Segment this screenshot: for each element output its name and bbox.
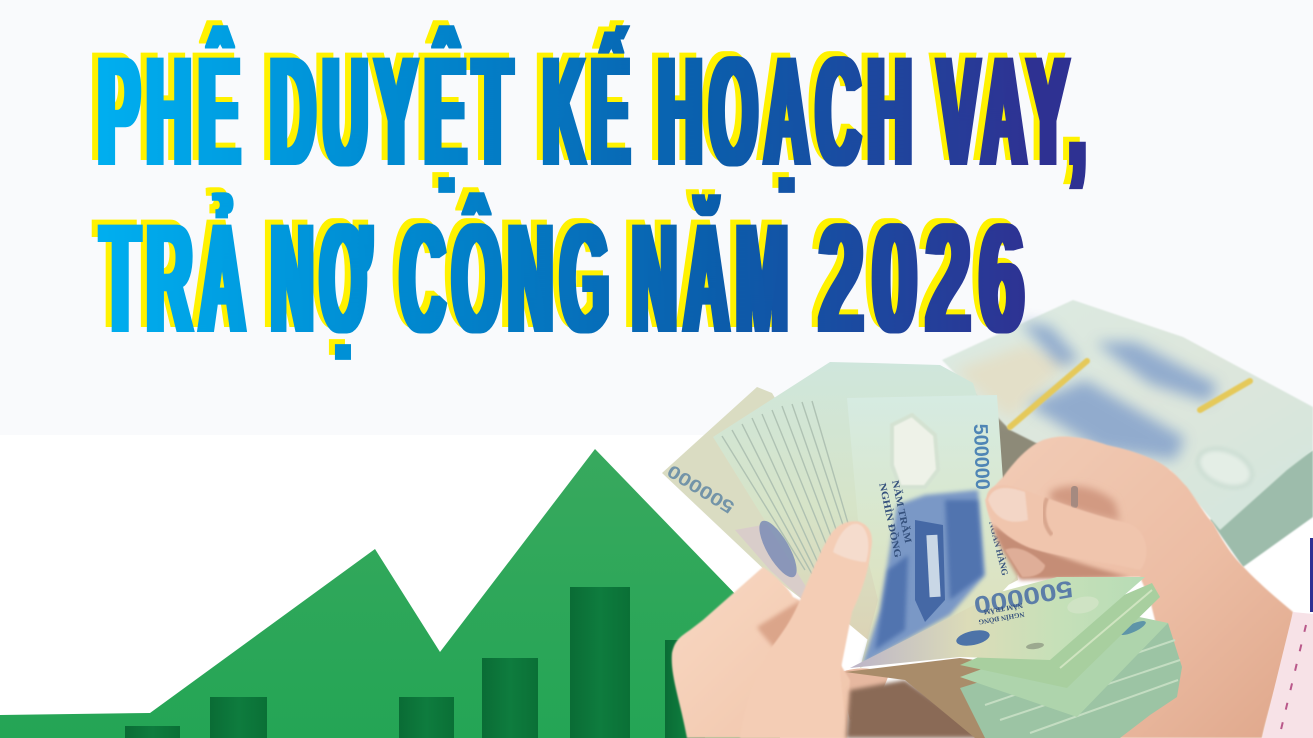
middle note	[960, 615, 1168, 717]
value in words on front note	[876, 479, 917, 559]
right hand	[985, 436, 1293, 738]
title line 1: KẾ	[543, 25, 636, 199]
shadow between knuckles	[1050, 486, 1120, 521]
knuckle crease	[1044, 498, 1052, 535]
title line 2: 2026	[819, 192, 1033, 366]
curled finger below	[1005, 548, 1045, 577]
cuff stitching	[1279, 625, 1306, 738]
value in words on top note	[976, 601, 1025, 626]
extra finger under thumb	[838, 668, 888, 720]
title line 1: PHÊ	[98, 25, 247, 199]
lower finger shadow	[993, 525, 1130, 580]
title line 2: TRẢ	[101, 192, 252, 366]
bar 3	[399, 697, 454, 738]
index finger	[987, 485, 1146, 570]
value in words on front note: NGHÌN ĐỒNG	[876, 482, 905, 559]
blue printing patches	[1020, 322, 1218, 460]
hand and wrist	[985, 436, 1293, 738]
fingernail	[988, 488, 1028, 522]
value in words on top note: NGHÌN ĐỒNG	[977, 610, 1025, 626]
grey oval mark	[1026, 642, 1044, 650]
title line 2	[101, 192, 1033, 366]
title line 1: HOẠCH	[658, 25, 919, 199]
shadow gap under stack	[973, 390, 1050, 500]
value in words on top note: NĂM TRĂM	[983, 601, 1023, 616]
shirt cuff	[1262, 612, 1313, 738]
top note face	[850, 577, 1145, 668]
title line 1	[98, 25, 1093, 199]
upper note edge line	[1060, 590, 1152, 668]
rear note pink lower edge	[735, 520, 825, 600]
outer green notes	[960, 623, 1182, 738]
bar 6	[665, 640, 705, 738]
denomination on rear note: 500000	[664, 461, 738, 517]
background: upper pale panel	[0, 0, 1313, 435]
fan of banknotes	[662, 362, 1018, 668]
bank name on front note: NGÂN HÀNG	[987, 520, 1010, 577]
title	[98, 25, 1093, 366]
chart silhouette	[0, 449, 780, 738]
left hand	[672, 521, 888, 738]
temple building	[915, 520, 945, 622]
palm	[672, 567, 850, 738]
denomination on front note: 500000	[969, 423, 993, 490]
bottom banknote stack	[845, 574, 1182, 738]
darker tree engraving	[875, 500, 983, 650]
blurred stack of banknotes	[942, 300, 1313, 567]
front note	[847, 395, 1018, 668]
dark shadow under notes	[846, 680, 990, 738]
rearmost note	[662, 387, 860, 600]
thumbnail	[833, 524, 868, 562]
pale building panel	[926, 535, 941, 597]
value in words on front note: NĂM TRĂM	[889, 479, 914, 545]
seal on top note	[955, 628, 991, 648]
title line 2: NỢ	[271, 192, 377, 366]
green mountain chart	[0, 449, 780, 738]
stack side	[1210, 450, 1313, 567]
bar 5	[570, 587, 630, 738]
green note edge lines	[985, 640, 1180, 733]
title line 2: CÔNG	[400, 192, 616, 366]
cuff fabric	[1262, 612, 1313, 738]
ring	[1071, 486, 1078, 508]
title line 2: NĂM	[632, 192, 795, 366]
fan note edges	[722, 401, 850, 576]
cropped navy sliver at right edge	[1310, 538, 1313, 612]
stack top face	[942, 300, 1313, 530]
page edges	[845, 658, 1090, 738]
finger shadow	[757, 600, 802, 652]
bar 1	[125, 726, 180, 738]
lotus watermark	[892, 415, 938, 487]
bar 4	[482, 658, 538, 738]
peach tint	[955, 345, 1070, 420]
fanned notes	[713, 362, 1018, 650]
blue engraving	[862, 490, 985, 665]
denomination on top note: 500000	[972, 574, 1075, 618]
upper note edge	[960, 583, 1160, 688]
blue patch on middle note	[1119, 618, 1147, 638]
thumb	[740, 521, 872, 738]
pale mark on top note	[1066, 594, 1100, 616]
background: white lower panel	[0, 435, 1313, 738]
title line 1: DUYỆT	[270, 25, 519, 199]
portrait on rear note	[752, 516, 804, 582]
yellow paper bands	[1010, 361, 1250, 427]
pale watermark on stack	[1193, 442, 1257, 494]
bar 2	[210, 697, 267, 738]
